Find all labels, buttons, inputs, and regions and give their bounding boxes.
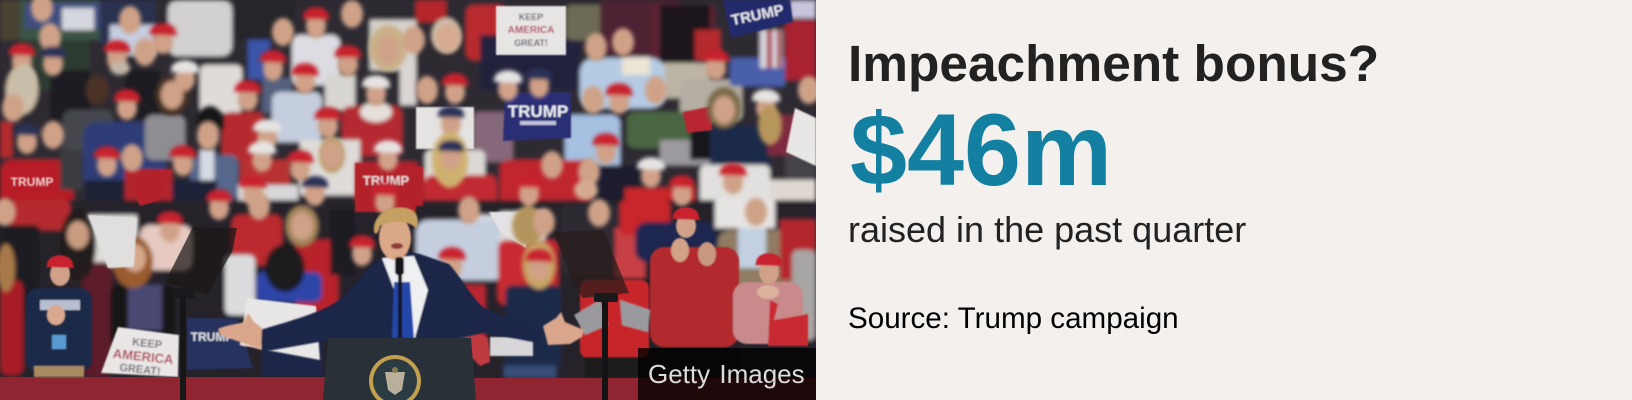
- photo credit: Getty Images: [648, 359, 805, 389]
- key figure: $46m: [850, 92, 1112, 207]
- panel: rally photograph: [0, 0, 816, 400]
- signs held in the crowd: TRUMP: [730, 2, 785, 29]
- lectern: [323, 338, 476, 400]
- signs held in the crowd: AMERICA: [508, 25, 554, 36]
- signs held in the crowd: KEEP: [132, 336, 163, 352]
- signs held in the crowd: KEEP: [519, 12, 543, 22]
- signs held in the crowd: TRUMP: [508, 102, 568, 121]
- signs held in the crowd: [11, 0, 816, 378]
- signs held in the crowd: AMERICA: [112, 346, 175, 367]
- photo credit: [638, 348, 816, 400]
- signs held in the crowd: TRUMP: [363, 173, 409, 188]
- signs held in the crowd: TRUMP: [191, 330, 233, 344]
- red railing right: [474, 378, 816, 400]
- source line: Source: Trump campaign: [848, 302, 1179, 335]
- signs held in the crowd: GREAT!: [119, 362, 161, 378]
- crowd in the background: [0, 0, 816, 380]
- teleprompter left: [165, 227, 237, 400]
- heading: Impeachment bonus?: [848, 34, 1379, 92]
- figure description: raised in the past quarter: [848, 209, 1246, 250]
- signs held in the crowd: GREAT!: [514, 38, 548, 48]
- signs held in the crowd: TRUMP: [11, 175, 53, 189]
- teleprompter right: [554, 230, 629, 400]
- presidential seal: [369, 355, 421, 400]
- crowd heads and caps: [0, 0, 820, 280]
- speaker at the lectern: [218, 207, 584, 352]
- clapping supporters in the foreground: [26, 207, 808, 377]
- red railing: [0, 377, 330, 400]
